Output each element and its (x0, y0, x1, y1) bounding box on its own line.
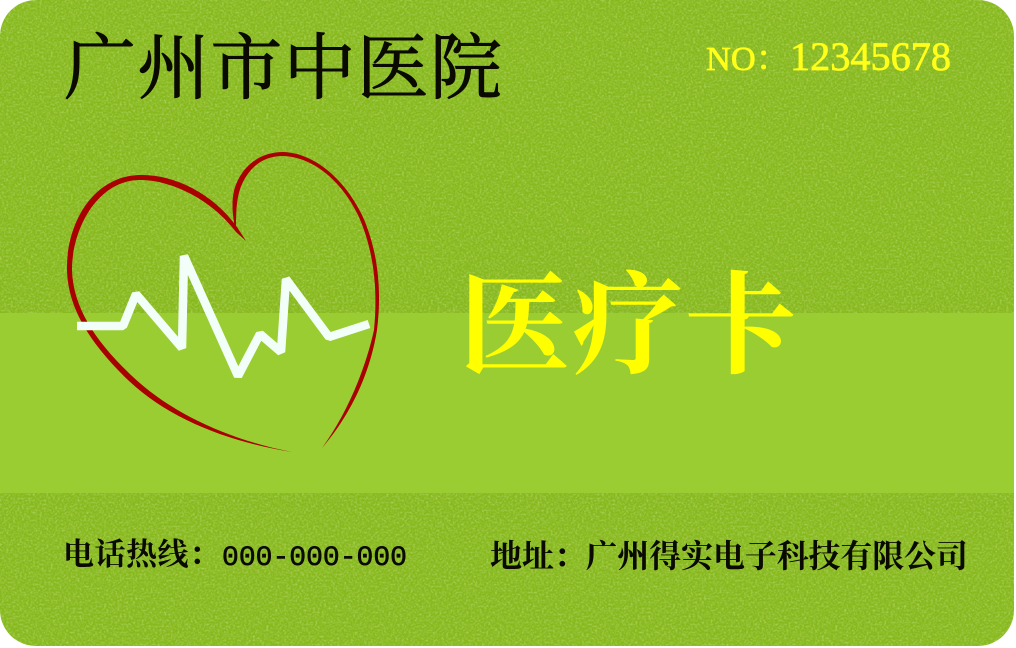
heartbeat line (77, 256, 369, 376)
light green band (0, 313, 1014, 493)
phone: 电话热线： (63, 537, 220, 572)
card number (706, 34, 951, 79)
address: 地址：广州得实电子科技有限公司 (490, 538, 968, 574)
card number: NO： (706, 41, 790, 78)
heart outline (67, 152, 379, 452)
card name: 医疗卡 (459, 266, 796, 389)
phone: 000-000-000 (222, 543, 407, 574)
title: 广州市中医院 (64, 29, 502, 109)
icon: heart with heartbeat (67, 152, 379, 452)
phone (63, 537, 407, 574)
card number: 12345678 (790, 34, 951, 79)
